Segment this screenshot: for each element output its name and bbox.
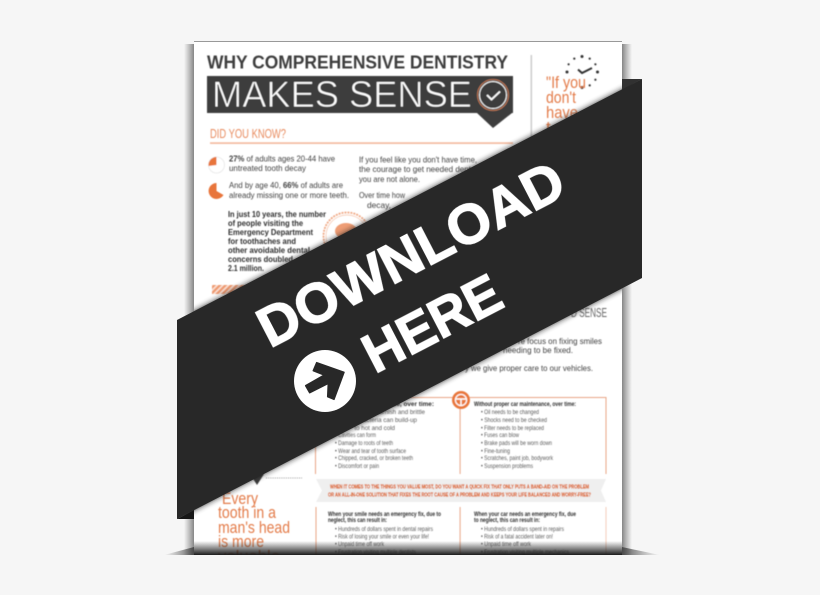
text block: no time: decay, [367,201,391,210]
stat: 66 percent: already missing one or more teeth. [229,191,349,200]
intro text: re focus on fixing smiles [518,337,602,346]
list: smile maintenance: • Wear and tear of tooth surface [335,448,406,455]
list: car emergency [474,511,576,556]
intro text [465,337,602,373]
icon: clock [566,55,599,89]
download banner [177,79,642,519]
list: car maintenance: • Oil needs to be changed [481,409,539,416]
stat: 66 percent [229,181,349,200]
icon: check badge [478,80,508,110]
title banner: makes sense [207,73,513,128]
text block: no time [359,156,477,210]
title banner: makes sense: MAKES SENSE [212,73,472,115]
stat: 27 percent: 27% of adults ages 20-44 have [229,155,335,164]
text block: no time: Over time how [359,191,405,200]
list: car emergency: to neglect, this can result in: [474,517,540,524]
list: smile maintenance: • Chipped, cracked, or broken teeth [335,455,413,462]
intro text: y we give proper care to our vehicles. [465,364,593,373]
list: smile maintenance: tarnish and brittle [378,409,426,416]
icon: arrow in circle [294,350,356,412]
banner shadow [177,79,642,519]
heading: makes sense: D SENSE [571,306,607,320]
stat: 27 percent [229,155,335,173]
list: car maintenance: • Suspension problems [481,463,533,470]
list: car emergency: • Hundreds of dollars spent in repairs [481,526,564,533]
list: smile maintenance: to hot and cold [354,425,396,432]
text block: emergency visits: other avoidable dental [228,246,310,255]
banner text: download: DOWNLOAD [247,148,575,359]
stat: 27 percent: untreated tooth decay [229,164,307,173]
text block: emergency visits [228,210,327,273]
text block: emergency visits: for toothaches and [228,237,296,246]
quote: every tooth: Every [222,489,258,508]
list: smile emergency: neglect, this can result in: [328,517,387,524]
list: car maintenance: • Brake pads will be worn down [481,440,552,447]
stat: 66 percent: And by age 40, 66% of adults are [229,181,343,190]
list: smile emergency: When your smile needs an emergency fix, due to [328,511,441,518]
quote: if you don't have time: have [546,103,578,122]
list: car emergency: When your car needs an emergency fix, due [474,511,576,518]
quote: if you don't have time: t [546,118,551,137]
pie: 27 percent [208,157,224,173]
quote: every tooth: tooth in a [218,503,276,522]
list: car maintenance: • Scratches, paint job, bodywork [481,455,554,462]
text block: emergency visits: In just 10 years, the number [228,210,327,219]
list: smile maintenance [335,401,434,470]
text block: no time: the courage to get needed dent [359,165,472,174]
banner text: here: HERE [352,261,512,385]
quote: if you don't have time: "If you [546,73,586,92]
title: WHY COMPREHENSIVE DENTISTRY [207,52,508,72]
icon: scalloped tooth badge [322,211,367,244]
quote: every tooth: is more [218,532,264,551]
list: smile emergency [328,511,441,556]
text block: no time: If you feel like you don't have time, [359,156,477,165]
text block: emergency visits: 2.1 million. [228,264,264,273]
infographic sheet [194,41,622,566]
quote: if you don't have time [546,75,586,128]
icon: small dark badge with dotted line [250,474,302,485]
list: smile maintenance: nance, over time: [381,401,434,408]
list: smile maintenance: • Discomfort or pain [335,463,379,470]
text block: emergency visits: concerns doubled [228,255,293,264]
quote: every tooth: valuable [218,547,280,566]
divider [530,55,532,145]
intro text: needing to be fixed. [503,346,573,355]
list: car emergency: • Frustration visiting multiple mechanics [481,549,569,556]
ribbon callout [316,479,606,502]
list: smile emergency: • Frustration visiting multiple dentists [335,549,416,556]
list: car maintenance: Without proper car maintenance, over time: [474,401,576,408]
list: car maintenance: • Fuses can blow [481,432,519,439]
icon: steering wheel [452,391,470,409]
sheet content [207,52,607,566]
list: car maintenance: • Filter needs to be replaced [481,425,544,432]
heading: did you know: DID YOU KNOW? [210,127,286,141]
ribbon callout: WHEN IT COMES TO THE THINGS YOU VALUE MOST, DO YOU WANT A QUICK FIX THAT ONLY PUTS A BAND-AID ON THE PROBLEM [330,484,589,490]
list: car emergency: • Unpaid time off work [481,541,532,548]
quote: if you don't have time: don't [546,88,576,107]
text block: emergency visits: Emergency Department [228,228,313,237]
sheet bottom shade [194,541,622,555]
list: car maintenance: • Shocks need to be checked [481,417,547,424]
quote: every tooth: man's head [218,518,290,537]
panel: emergency comparison [316,507,606,556]
list: car emergency: • Risk of a fatal accident later on! [481,534,553,540]
ribbon callout: OR AN ALL-IN-ONE SOLUTION THAT FIXES THE ROOT CAUSE OF A PROBLEM AND KEEPS YOUR LIFE BALANCED AND WORRY-FREE? [328,492,591,498]
list: car maintenance: • Fine-tuning [481,448,510,455]
list: smile maintenance: bacteria can build-up [360,417,418,424]
list: smile emergency: • Hundreds of dollars spent in dental repairs [335,526,433,533]
list: smile emergency: • Risk of losing your smile or even your life! [335,534,429,540]
text block: emergency visits: of people visiting the [228,219,303,228]
list: smile emergency: • Unpaid time off work [335,541,385,548]
decorative chevron strip [212,285,246,294]
panel: over time comparison [315,391,606,474]
list: smile maintenance: • Cavities can form [335,432,376,439]
pie: 66 percent [209,183,224,199]
list: smile maintenance: • Damage to roots of teeth [335,440,393,447]
text block: no time: you are not alone. [359,175,420,184]
list: car maintenance [474,401,576,470]
quote: every tooth [218,492,290,554]
sheet side shadows [164,44,660,555]
